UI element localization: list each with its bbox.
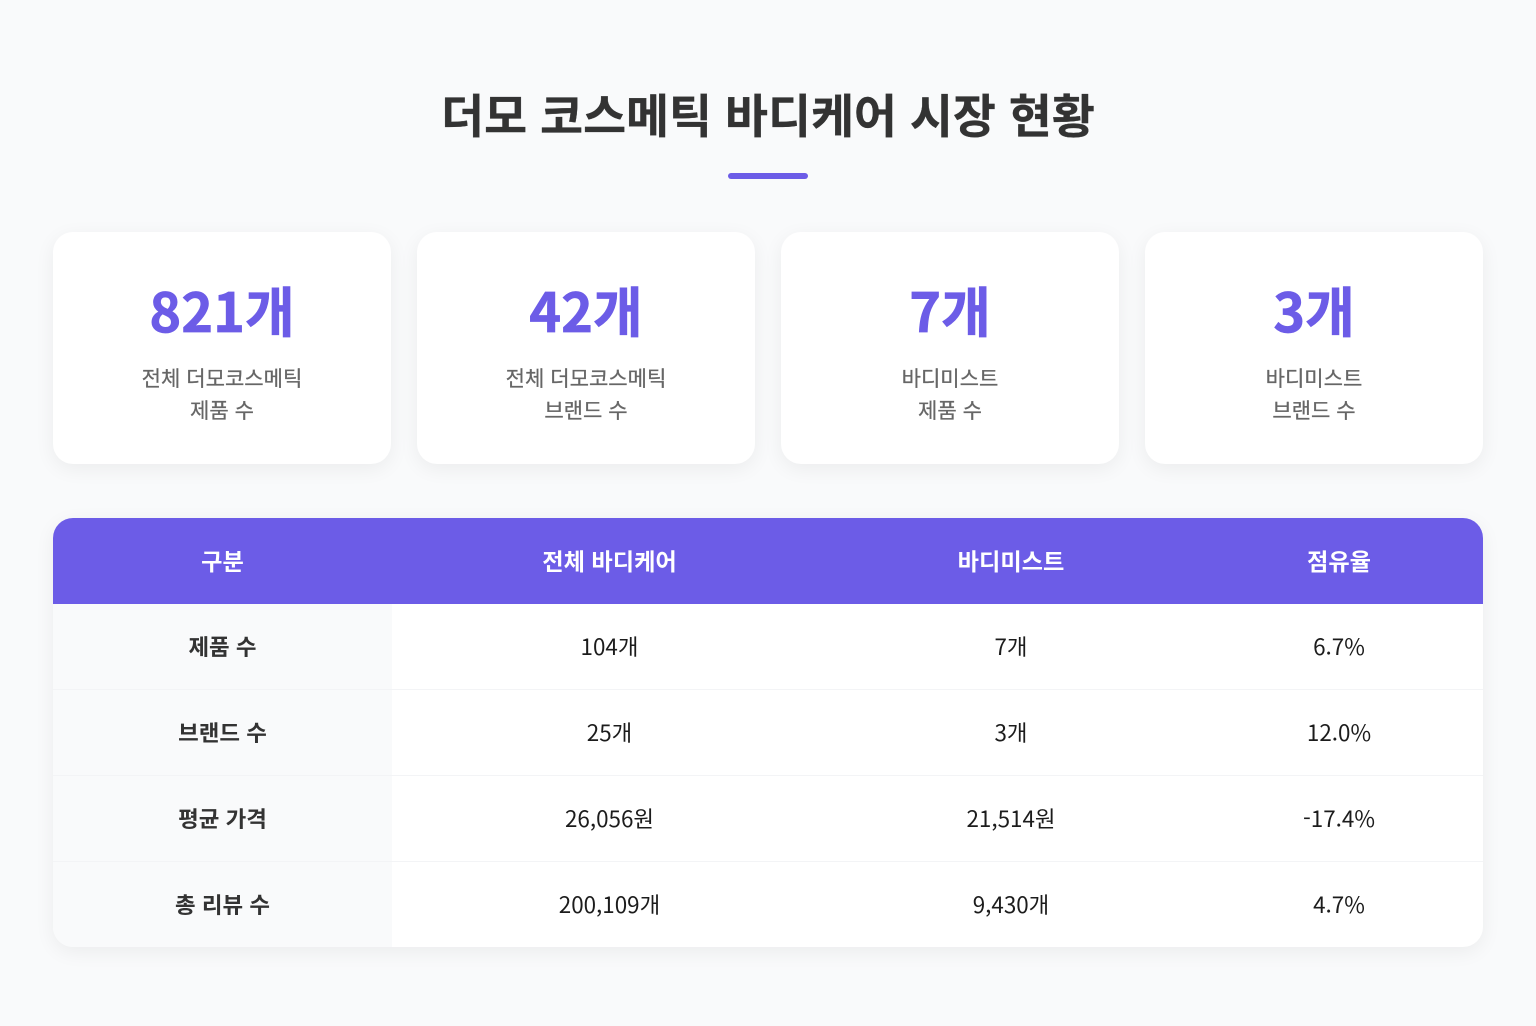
card: total brands: 브랜드 수: [544, 395, 628, 425]
card: bodymist products: 제품 수: [918, 395, 982, 425]
row: product count: [53, 604, 1483, 690]
row: average price: [53, 776, 1483, 862]
table header: [53, 518, 1483, 604]
row: total reviews: 총 리뷰 수: [175, 888, 270, 920]
table header: 구분: [201, 543, 244, 577]
card: total products: [53, 232, 391, 464]
table header: 점유율: [1307, 543, 1371, 577]
row: average price: 26,056원: [565, 802, 654, 834]
card: bodymist products: 7개: [909, 269, 991, 348]
card: bodymist brands: 브랜드 수: [1272, 395, 1356, 425]
title: 더모 코스메틱 바디케어 시장 현황: [441, 80, 1095, 147]
row: product count: 6.7%: [1313, 630, 1365, 662]
row: product count: 7개: [994, 630, 1028, 662]
card: total products: 821개: [149, 269, 295, 348]
card: total products: 전체 더모코스메틱: [142, 363, 302, 393]
table header: 전체 바디케어: [542, 543, 677, 577]
row: total reviews: [175, 888, 1365, 920]
row: brand count: 12.0%: [1307, 716, 1371, 748]
row: average price: 평균 가격: [178, 802, 267, 834]
card: total products: 제품 수: [190, 395, 254, 425]
card: bodymist brands: 바디미스트: [1266, 363, 1362, 393]
card: bodymist brands: [1145, 232, 1483, 464]
row: brand count: 25개: [587, 716, 632, 748]
card: bodymist brands: 3개: [1273, 269, 1355, 348]
card: total brands: 전체 더모코스메틱: [506, 363, 666, 393]
row: total reviews: 9,430개: [973, 888, 1049, 920]
title underline: [728, 173, 808, 179]
comparison table: [53, 518, 1483, 947]
row: average price: 21,514원: [966, 802, 1055, 834]
card: bodymist products: [781, 232, 1119, 464]
row: brand count: [53, 690, 1483, 776]
row: average price: -17.4%: [1303, 802, 1375, 834]
card: total brands: 42개: [529, 269, 643, 348]
row: total reviews: 4.7%: [1313, 888, 1365, 920]
row: product count: 104개: [581, 630, 638, 662]
row: brand count: 브랜드 수: [178, 716, 267, 748]
row: product count: 제품 수: [188, 630, 257, 662]
table header: 바디미스트: [958, 543, 1064, 577]
row: total reviews: 200,109개: [559, 888, 660, 920]
row: brand count: 3개: [994, 716, 1028, 748]
card: bodymist products: 바디미스트: [902, 363, 998, 393]
card: total brands: [417, 232, 755, 464]
